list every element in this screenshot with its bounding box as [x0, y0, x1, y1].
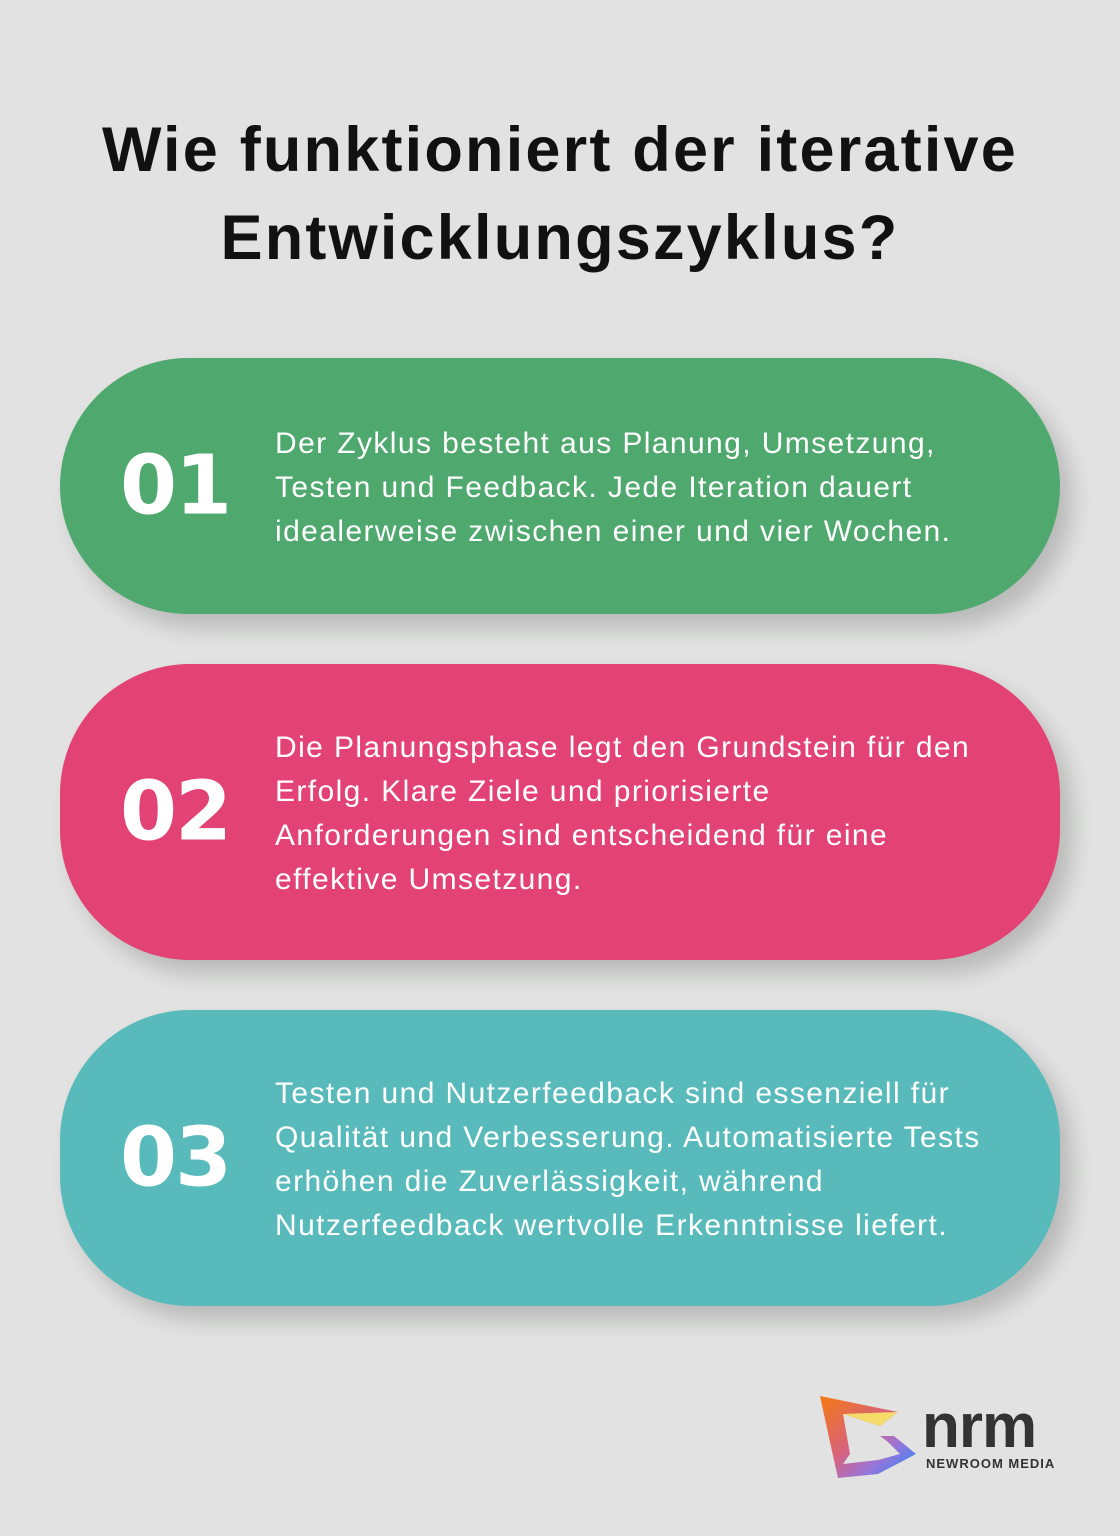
title: Wie funktioniert der iterative	[102, 115, 1018, 185]
icon: logo mark	[820, 1396, 916, 1478]
text 01	[275, 427, 951, 548]
text 03: Qualität und Verbesserung. Automatisierte Tests	[275, 1121, 981, 1154]
text 02: Erfolg. Klare Ziele und priorisierte	[275, 775, 771, 808]
panel: 02	[60, 664, 1060, 960]
text 02: Die Planungsphase legt den Grundstein für den	[275, 731, 970, 764]
number 01: 01	[120, 438, 230, 534]
text 03: erhöhen die Zuverlässigkeit, während	[275, 1165, 824, 1198]
title	[102, 115, 1018, 273]
text 03: Nutzerfeedback wertvolle Erkenntnisse liefert.	[275, 1209, 948, 1242]
brand subtitle: NEWROOM MEDIA	[926, 1456, 1055, 1471]
text 01: idealerweise zwischen einer und vier Wochen.	[275, 515, 951, 548]
number 03: 03	[120, 1110, 230, 1206]
text 02	[275, 731, 970, 896]
text 01: Der Zyklus besteht aus Planung, Umsetzung,	[275, 427, 936, 460]
brand text: nrm	[922, 1392, 1036, 1461]
text 03: Testen und Nutzerfeedback sind essenziell für	[275, 1077, 950, 1110]
panel: 03	[60, 1010, 1060, 1306]
text 02: effektive Umsetzung.	[275, 863, 583, 896]
text 01: Testen und Feedback. Jede Iteration dauert	[275, 471, 913, 504]
text 02: Anforderungen sind entscheidend für eine	[275, 819, 888, 852]
panel: 01	[60, 358, 1060, 614]
logo	[820, 1392, 1055, 1478]
text 03	[275, 1077, 981, 1242]
number 02: 02	[120, 764, 230, 860]
title: Entwicklungszyklus?	[221, 203, 899, 273]
